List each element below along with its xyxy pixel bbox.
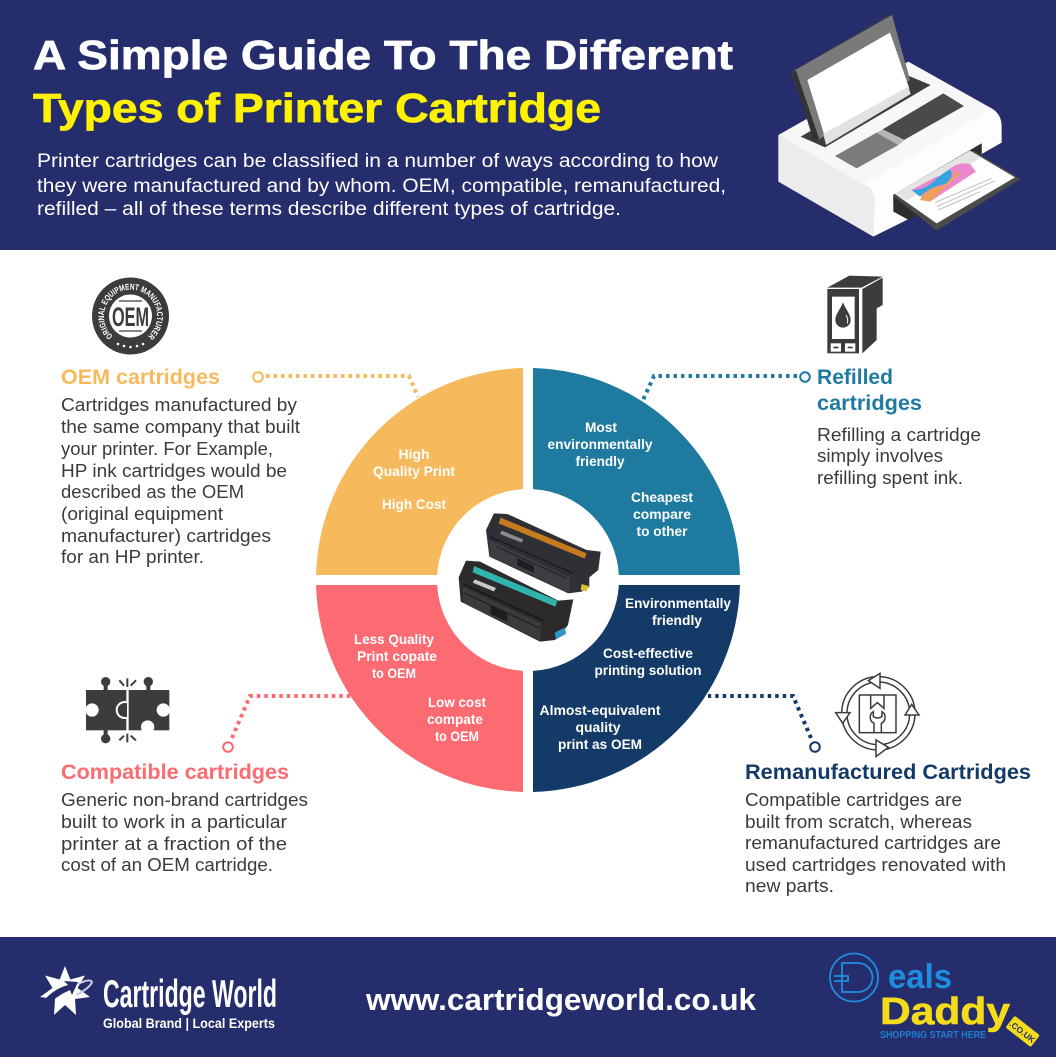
text: Remanufactured description: used cartridges renovated with (745, 855, 1006, 875)
quadrant: Refilled: Most (585, 420, 618, 435)
text: Refilled description: simply involves (817, 446, 943, 466)
text: OEM description: HP ink cartridges would be (61, 461, 287, 481)
heading: Refilled cartridges: Refilled (817, 366, 893, 389)
quadrant: Refilled: environmentally (548, 437, 653, 452)
quadrant: Remanufactured: Almost-equivalent (540, 703, 661, 718)
text: Compatible description: Generic non-brand cartridges (61, 790, 308, 810)
heading: OEM cartridges: OEM cartridges (61, 366, 220, 389)
quadrant: Refilled: Cheapest (631, 490, 694, 505)
text: OEM description: Cartridges manufactured by (61, 395, 297, 415)
panel: Remanufactured Cartridges (745, 673, 1031, 896)
text: Remanufactured description: Compatible cartridges are (745, 790, 962, 810)
connector: Refilled (643, 372, 810, 400)
intro text: refilled – all of these terms describe different types of cartridge. (37, 199, 621, 220)
heading: Remanufactured Cartridges: Remanufactured Cartridges (745, 761, 1031, 784)
logo: Cartridge World: Global Brand | Local Experts (103, 1016, 275, 1031)
logo: Deals Daddy: .CO.UK (1008, 1019, 1038, 1045)
quadrant: Refilled: friendly (576, 454, 625, 469)
text: Compatible description: cost of an OEM cartridge. (61, 855, 273, 875)
text: Remanufactured description: new parts. (745, 876, 834, 896)
quadrant: Remanufactured: friendly (652, 613, 702, 628)
quadrant: Compatible (316, 585, 523, 792)
text: Remanufactured description: built from scratch, whereas (745, 812, 972, 832)
quadrant: OEM: High Cost (382, 497, 446, 512)
text: Refilled description: Refilling a cartridge (817, 425, 981, 445)
icon: OEM badge: ORIGINAL EQUIPMENT MANUFACTURER (98, 284, 163, 340)
heading: Refilled cartridges (817, 366, 922, 415)
text: Compatible description (61, 790, 308, 875)
text: Refilled description: refilling spent ink. (817, 468, 963, 488)
quadrant: Compatible: Less Quality (354, 632, 434, 647)
icon: recycle box and wrench (836, 673, 919, 757)
text: Compatible description: built to work in a particular (61, 812, 287, 832)
footer band (0, 937, 1056, 1057)
quadrant: Refilled (533, 368, 740, 575)
text: OEM description: your printer. For Example, (61, 439, 273, 459)
text: OEM description: described as the OEM (61, 482, 244, 502)
illustration: two toner cartridges (459, 513, 601, 642)
text: OEM description: (original equipment (61, 504, 223, 524)
logo: Deals Daddy: eals (888, 958, 952, 996)
text: OEM description (61, 395, 300, 567)
quadrant: Remanufactured: Cost-effective (603, 646, 693, 661)
title: Types of Printer Cartridge (33, 85, 601, 131)
intro text: Printer cartridges can be classified in a number of ways according to how (37, 151, 718, 172)
header band (0, 0, 1056, 250)
quadrant: OEM (316, 368, 523, 575)
quadrant: Compatible: compate (427, 712, 483, 727)
icon: OEM badge: OEM (112, 302, 149, 332)
heading: Compatible cartridges: Compatible cartridges (61, 761, 289, 784)
quadrant: Compatible: to OEM (372, 666, 416, 681)
logo: Deals Daddy (830, 954, 1040, 1047)
intro text (37, 151, 726, 220)
quadrant: Remanufactured: print as OEM (558, 737, 642, 752)
website url: www.cartridgeworld.co.uk (365, 982, 757, 1017)
icon: ink cartridge (827, 276, 883, 353)
quadrant: Compatible: to OEM (435, 729, 479, 744)
quadrant: Compatible: Low cost (428, 695, 486, 710)
panel: Refilled cartridges (817, 276, 981, 488)
heading: Refilled cartridges: cartridges (817, 392, 922, 415)
quadrant: OEM: Quality Print (373, 464, 456, 479)
icon: puzzle pieces (85, 677, 170, 743)
title (33, 32, 733, 131)
text: OEM description: manufacturer) cartridges (61, 526, 271, 546)
logo: Deals Daddy: Daddy (880, 991, 1010, 1033)
text: OEM description: for an HP printer. (61, 547, 204, 567)
chart: four-quadrant donut (316, 368, 740, 792)
panel: Compatible cartridges (61, 677, 308, 875)
logo: Cartridge World (39, 966, 277, 1031)
intro text: they were manufactured and by whom. OEM, compatible, remanufactured, (37, 176, 726, 197)
text: Remanufactured description: remanufactured cartridges are (745, 833, 1001, 853)
quadrant: Compatible: Print copate (357, 649, 438, 664)
quadrant: Remanufactured: quality (576, 720, 621, 735)
quadrant: Remanufactured: Environmentally (625, 596, 731, 611)
logo: Cartridge World: Cartridge World (103, 973, 277, 1016)
logo: Deals Daddy: SHOPPING START HERE (880, 1029, 986, 1041)
quadrant: OEM: High (398, 447, 430, 462)
quadrant: Remanufactured: printing solution (594, 663, 702, 678)
cartridge: teal roller (459, 561, 573, 642)
icon: printer illustration (778, 13, 1021, 237)
quadrant: Refilled: to other (636, 524, 688, 539)
cartridge: orange roller (486, 513, 601, 593)
quadrant: Refilled: compare (633, 507, 691, 522)
connector: OEM (253, 372, 418, 397)
quadrant: Remanufactured (533, 585, 740, 792)
panel: OEM cartridges (61, 278, 300, 567)
text: Remanufactured description (745, 790, 1006, 896)
connector: Compatible (223, 696, 352, 752)
text: OEM description: the same company that built (61, 417, 300, 437)
text: Compatible description: printer at a fraction of the (61, 834, 287, 854)
title: A Simple Guide To The Different (33, 32, 733, 78)
connector: Remanufactured (708, 696, 820, 752)
text: Refilled description (817, 425, 981, 488)
